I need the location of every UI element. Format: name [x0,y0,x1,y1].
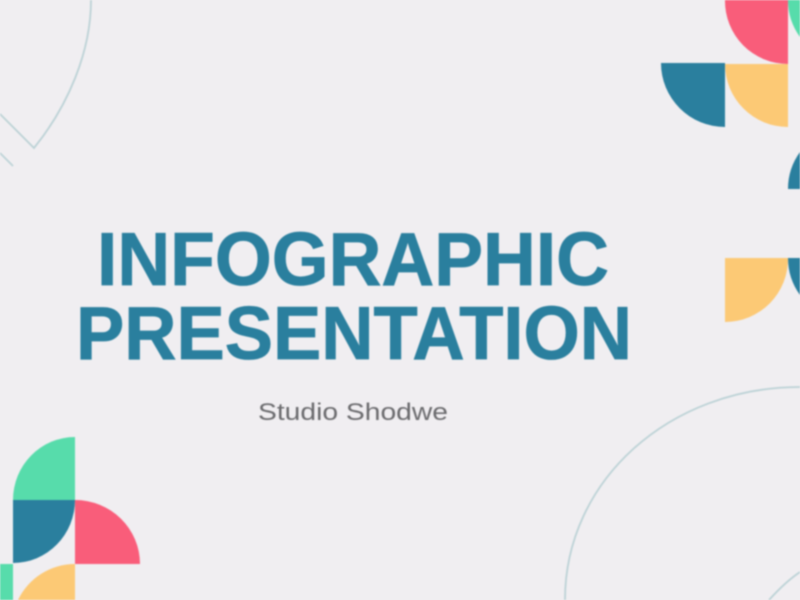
shapes: bottom left cluster [0,437,140,600]
outline arc: bottom right [565,387,800,600]
subtitle: Studio Shodwe [258,399,448,426]
title: INFOGRAPHIC [97,217,609,301]
outline arc: top left [0,0,91,166]
title [76,217,632,375]
title: PRESENTATION [76,291,632,375]
shapes: top right cluster [661,0,800,127]
shapes: right middle cluster [725,152,800,322]
